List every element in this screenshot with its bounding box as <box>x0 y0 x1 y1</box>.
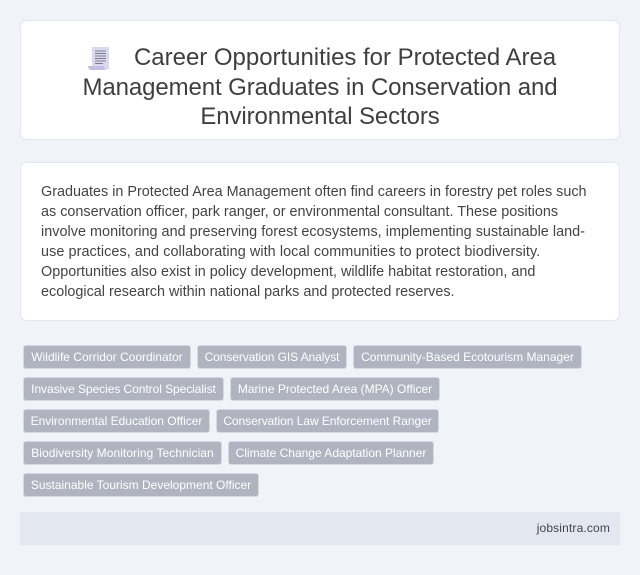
tag: Conservation Law Enforcement Ranger <box>223 414 432 428</box>
tag: Climate Change Adaptation Planner <box>236 446 426 460</box>
tag <box>353 345 582 369</box>
panel: description <box>20 162 620 321</box>
title: Environmental Sectors <box>200 103 440 130</box>
text block: description: use practices, and collaborating with local communities to protect biodiversity. <box>41 244 540 260</box>
tag: Biodiversity Monitoring Technician <box>31 446 214 460</box>
text block: description: involve monitoring and preserving forest ecosystems, implementing sustainable land- <box>41 224 585 240</box>
tag <box>23 377 224 401</box>
tag <box>197 345 347 369</box>
tag <box>23 441 222 465</box>
tag <box>230 377 440 401</box>
text block: description: ecological research within national parks and protected reserves. <box>41 284 455 300</box>
tag <box>23 473 259 497</box>
footer: jobsintra.com <box>537 521 610 535</box>
tag: Environmental Education Officer <box>31 414 202 428</box>
panel: title card <box>20 20 620 140</box>
text block: description <box>41 184 587 300</box>
tag <box>228 441 434 465</box>
title: Management Graduates in Conservation and <box>83 74 557 101</box>
panel: career tags <box>23 345 582 497</box>
title <box>83 44 557 130</box>
tag: Community-Based Ecotourism Manager <box>361 350 574 364</box>
tag: Wildlife Corridor Coordinator <box>31 350 183 364</box>
tag <box>23 409 210 433</box>
footer <box>20 512 620 545</box>
text block: description: as conservation officer, park ranger, or environmental consultant. These positions <box>41 204 558 220</box>
tag: Sustainable Tourism Development Officer <box>31 478 251 492</box>
icon: document <box>88 47 109 70</box>
text block: description: Graduates in Protected Area Management often find careers in forestry pet roles such <box>41 184 587 200</box>
tag: Marine Protected Area (MPA) Officer <box>238 382 432 396</box>
tag <box>216 409 439 433</box>
tag <box>23 345 191 369</box>
tag: Invasive Species Control Specialist <box>31 382 216 396</box>
tag: Conservation GIS Analyst <box>205 350 339 364</box>
title: Career Opportunities for Protected Area <box>134 44 556 71</box>
text block: description: Opportunities also exist in policy development, wildlife habitat restoration, and <box>41 264 535 280</box>
